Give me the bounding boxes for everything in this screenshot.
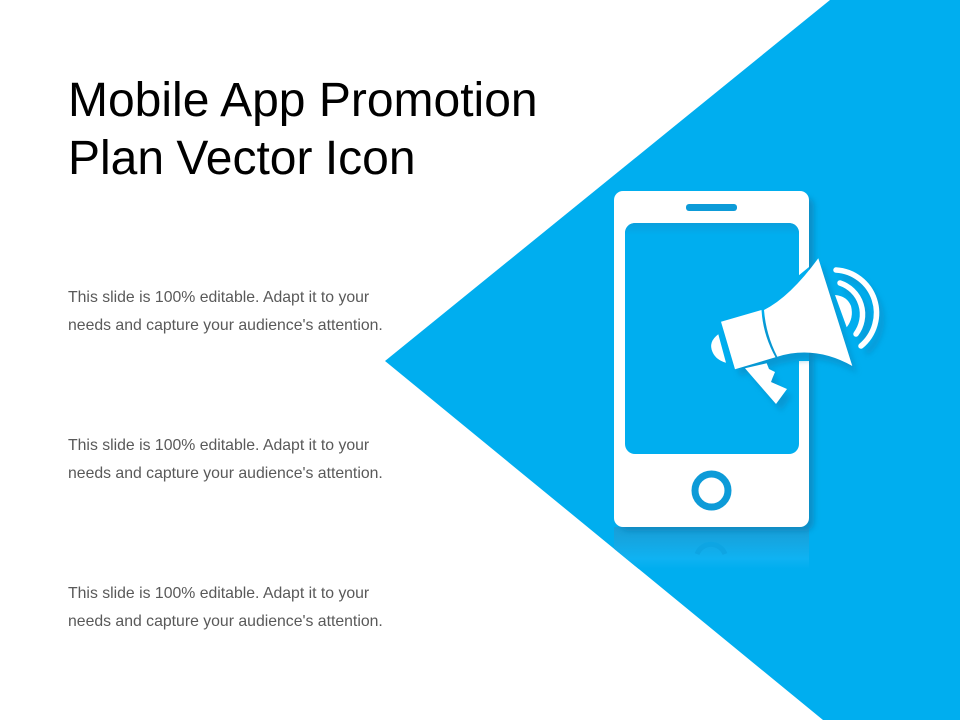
title: Mobile App Promotion (68, 74, 538, 127)
phone screen (625, 223, 799, 454)
horn (764, 258, 852, 366)
phone reflection (614, 527, 809, 569)
phone speaker (686, 204, 737, 211)
phone shadow (620, 197, 814, 531)
text block 2: This slide is 100% editable. Adapt it to your (68, 437, 369, 454)
back cap (711, 334, 726, 363)
icon: smartphone (614, 191, 809, 527)
megaphone shadow (726, 265, 882, 411)
text block 1: needs and capture your audience's attention. (68, 317, 383, 334)
icon: megaphone (711, 258, 877, 404)
phone body (614, 191, 809, 527)
handle (745, 363, 787, 404)
text block 2 (68, 437, 383, 482)
title: Plan Vector Icon (68, 132, 416, 185)
title (68, 74, 538, 185)
text block 3: This slide is 100% editable. Adapt it to your (68, 585, 369, 602)
phone home button (695, 474, 728, 507)
megaphone cutout on phone edge (798, 267, 809, 361)
graphic: blue triangle with phone and megaphone (385, 0, 960, 720)
blue triangle background (385, 0, 960, 720)
text block 3 (68, 585, 383, 630)
text block 2: needs and capture your audience's attention. (68, 465, 383, 482)
text block 3: needs and capture your audience's attention. (68, 613, 383, 630)
text block 1: This slide is 100% editable. Adapt it to your (68, 289, 369, 306)
front cap (835, 295, 852, 327)
megaphone body (721, 310, 776, 369)
sound wave inner (840, 283, 863, 334)
text block 1 (68, 289, 383, 334)
sound wave outer (836, 270, 877, 346)
